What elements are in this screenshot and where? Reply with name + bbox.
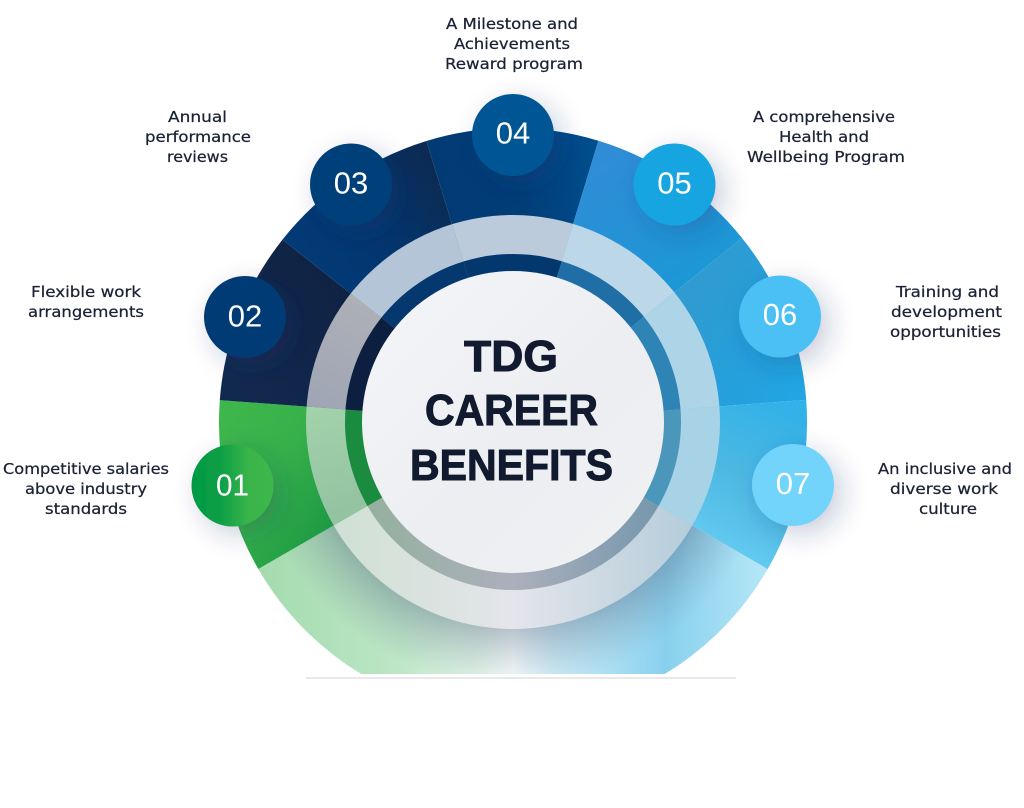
badge 01: 01 <box>216 468 249 502</box>
badge 03: 03 <box>334 166 368 200</box>
badge 07 <box>752 444 834 526</box>
sector: bottom fade <box>258 506 768 674</box>
badge 05 <box>634 144 716 226</box>
label 06: development <box>891 303 1002 321</box>
title <box>410 332 613 490</box>
label 03: reviews <box>167 148 228 166</box>
label 03 <box>145 108 251 166</box>
badge 05: 05 <box>657 166 692 200</box>
label 07: An inclusive and <box>878 460 1012 478</box>
label 05: Health and <box>779 128 869 146</box>
label 07 <box>878 460 1012 518</box>
label 06 <box>890 283 1002 341</box>
title: BENEFITS <box>410 441 613 490</box>
label 02 <box>28 283 144 321</box>
title: CAREER <box>425 386 598 435</box>
label 06: Training and <box>895 283 999 301</box>
bottom inner shadow <box>296 526 730 674</box>
label 04: A Milestone and <box>446 15 578 33</box>
wheel sectors <box>219 128 807 716</box>
sector 01 <box>218 400 367 569</box>
badge 07: 07 <box>776 466 810 501</box>
label 04 <box>445 15 583 73</box>
label 02: arrangements <box>28 303 144 321</box>
sector 05 <box>562 140 742 316</box>
label 07: diverse work <box>890 480 998 498</box>
label 05: A comprehensive <box>753 108 895 126</box>
label 01 <box>3 460 169 518</box>
translucent ring <box>306 215 720 629</box>
badge 04 <box>472 94 554 176</box>
badge 03 <box>310 144 392 226</box>
badge 02 <box>204 276 286 358</box>
title: TDG <box>464 332 558 381</box>
base line <box>306 677 736 679</box>
radial wheel <box>219 128 807 716</box>
label 05: Wellbeing Program <box>747 148 905 166</box>
label 01: Competitive salaries <box>3 460 169 478</box>
sector 04 <box>426 130 598 262</box>
label 02: Flexible work <box>31 283 141 301</box>
label 03: Annual <box>168 108 227 126</box>
badge 02: 02 <box>228 298 262 334</box>
sector 06 <box>644 238 806 410</box>
label 04: Reward program <box>445 55 583 73</box>
badge 04: 04 <box>496 116 530 150</box>
badge 01 <box>192 444 274 526</box>
center circle <box>362 271 664 573</box>
sector 02 <box>220 240 380 410</box>
sector 03 <box>282 141 464 318</box>
label 01: above industry <box>25 480 147 498</box>
label 05 <box>747 108 905 166</box>
label 06: opportunities <box>890 323 1001 341</box>
sector 07 <box>659 400 808 569</box>
label 03: performance <box>145 128 251 146</box>
label 04: Achievements <box>454 35 570 53</box>
label 07: culture <box>919 500 977 518</box>
inner dark ring <box>345 254 681 590</box>
badge 06 <box>739 276 821 358</box>
badge 06: 06 <box>763 297 797 332</box>
label 01: standards <box>45 500 127 518</box>
